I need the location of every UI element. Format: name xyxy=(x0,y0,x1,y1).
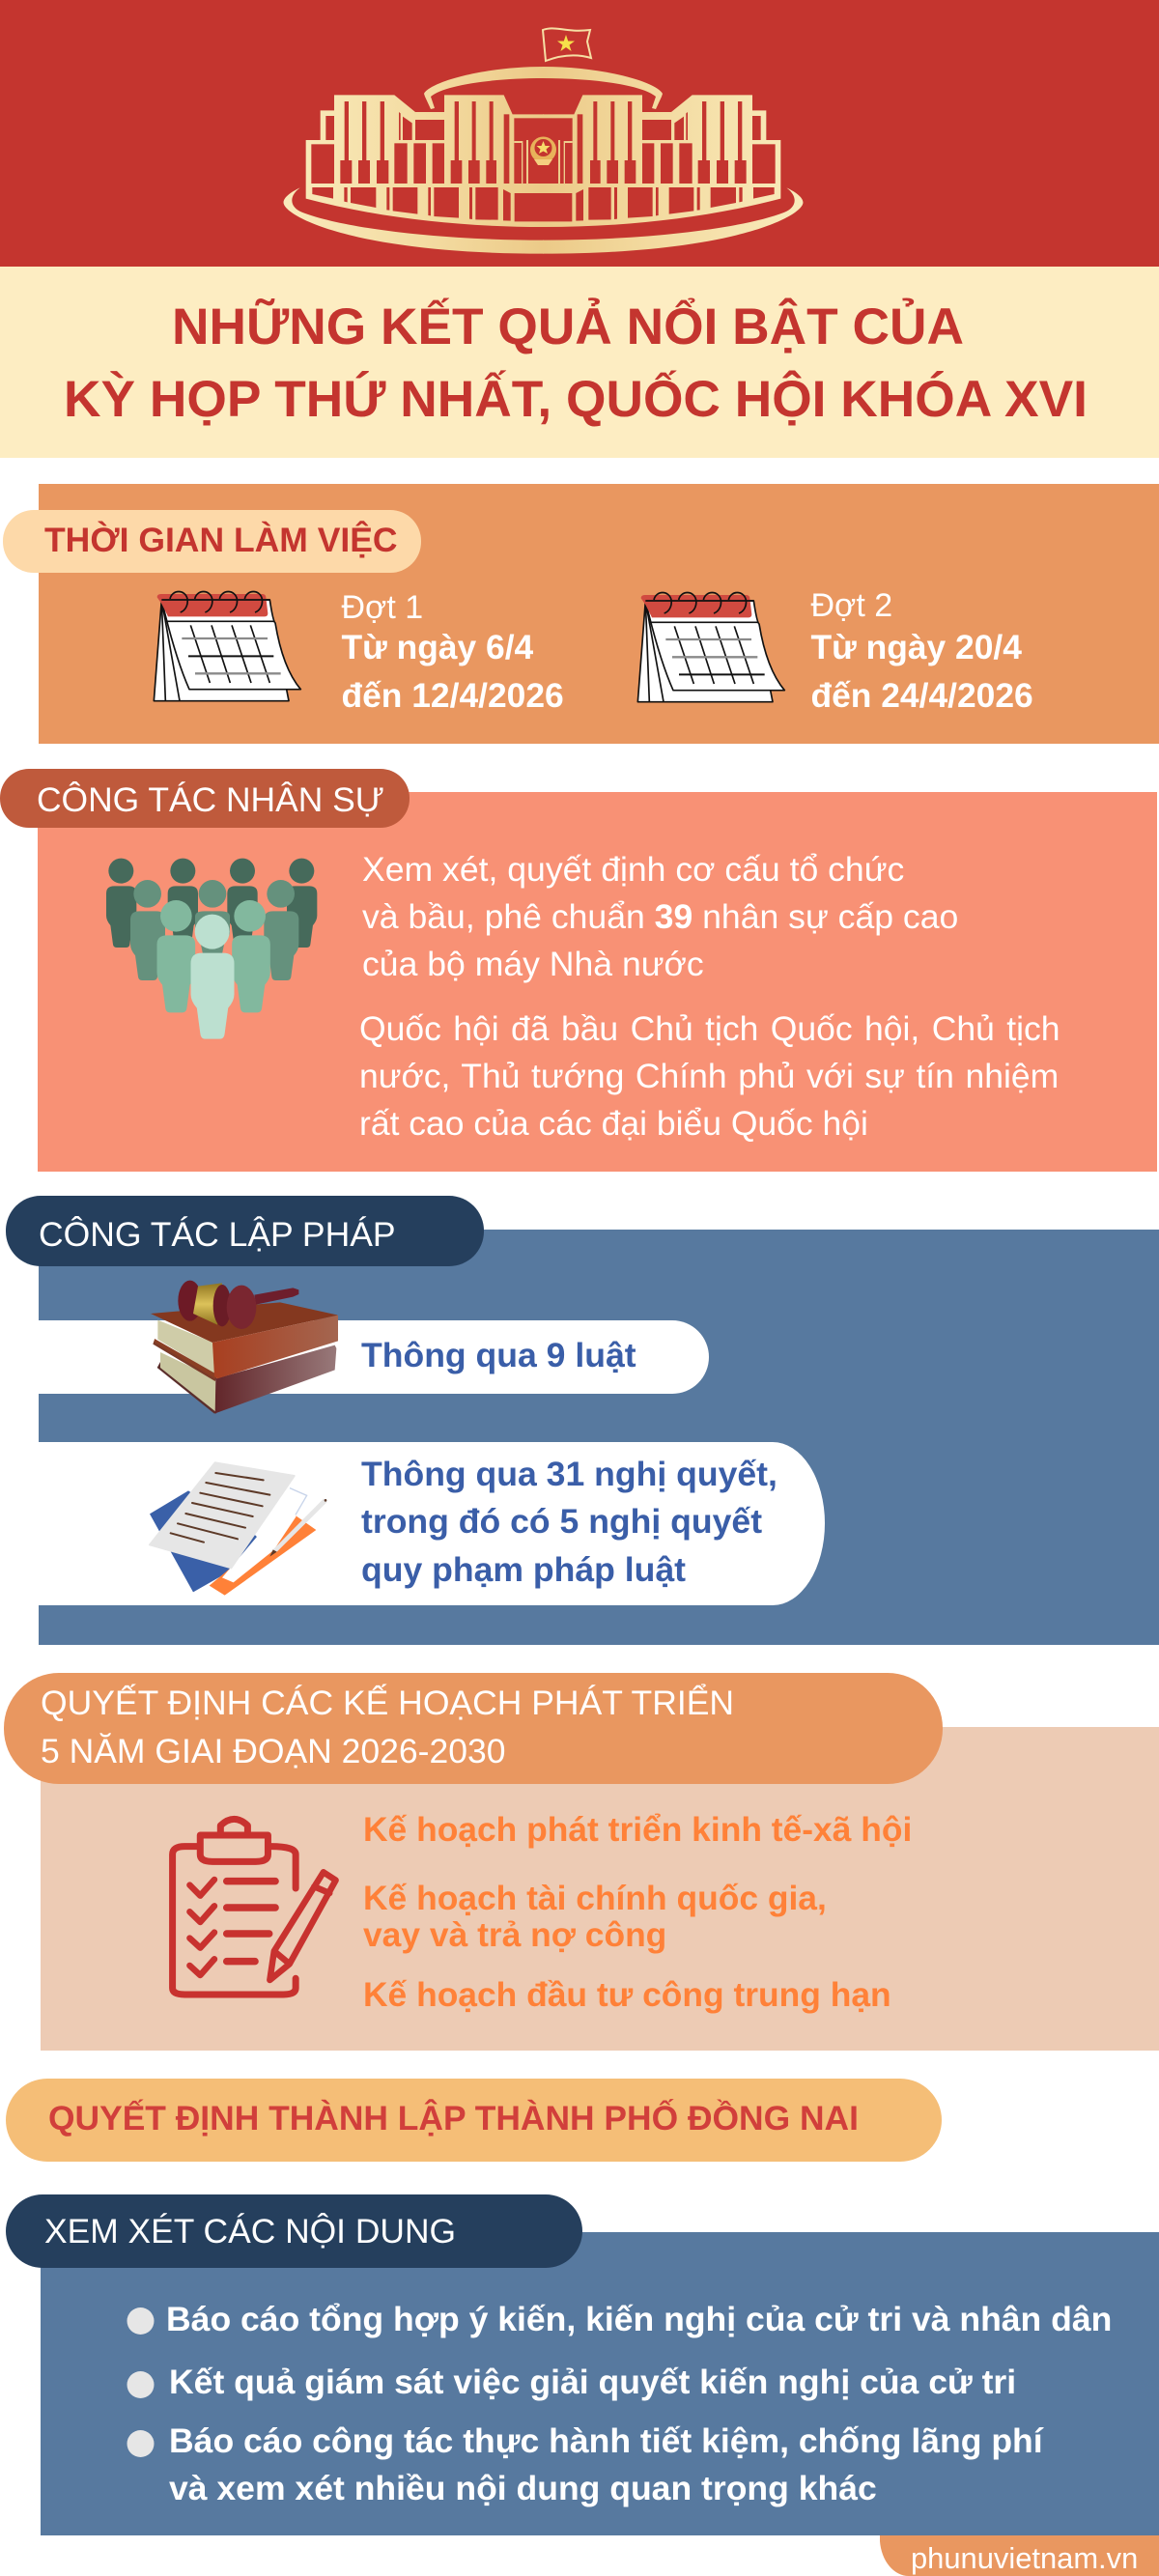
panel: personnel xyxy=(0,769,1157,1172)
icon: national flag xyxy=(543,28,591,61)
text: 31 resolutions: trong đó có 5 nghị quyết xyxy=(361,1502,762,1541)
banner: Dong Nai city xyxy=(6,2079,942,2162)
text: personnel summary: và bầu, phê chuẩn 39 nhân sự cấp cao xyxy=(362,897,958,936)
source badge xyxy=(880,2535,1159,2576)
panel: legislation xyxy=(6,1196,1159,1645)
bullet list: và xem xét nhiều nội dung quan trọng khác xyxy=(169,2469,877,2507)
text: 31 resolutions xyxy=(361,1455,777,1589)
text: leaders elected: rất cao của các đại biểu Quốc hội xyxy=(359,1104,868,1143)
source badge: phunuvietnam.vn xyxy=(911,2541,1138,2575)
bullet list: Báo cáo tổng hợp ý kiến, kiến nghị của cử tri và nhân dân xyxy=(166,2300,1112,2338)
bullet list: Báo cáo công tác thực hành tiết kiệm, chống lãng phí xyxy=(169,2421,1044,2460)
panel: other items xyxy=(6,2194,1159,2535)
text: plans list: vay và trả nợ công xyxy=(363,1915,666,1954)
heading: personnel xyxy=(0,769,410,828)
panel: working time xyxy=(3,484,1159,744)
heading: other items xyxy=(6,2194,582,2268)
icon: national emblem xyxy=(530,137,556,165)
text: 9 laws: Thông qua 9 luật xyxy=(361,1336,636,1374)
heading: working time xyxy=(3,510,421,573)
text: session 2: Từ ngày 20/4 xyxy=(811,628,1022,666)
text: session 1 xyxy=(342,589,564,715)
text: personnel summary: Xem xét, quyết định cơ cấu tổ chức xyxy=(362,850,904,889)
text: leaders elected xyxy=(359,1009,1060,1143)
text: leaders elected: nước, Thủ tướng Chính phủ với sự tín nhiệm xyxy=(359,1057,1059,1095)
bullet list: Kết quả giám sát việc giải quyết kiến nghị của cử tri xyxy=(169,2363,1016,2401)
text: plans list: Kế hoạch đầu tư công trung hạn xyxy=(363,1975,891,2014)
icon: group of people xyxy=(106,859,317,1039)
header banner: parliament building xyxy=(0,0,1159,267)
text: session 2 xyxy=(811,587,1033,715)
bullet list xyxy=(127,2300,1112,2507)
title: KỲ HỌP THỨ NHẤT, QUỐC HỘI KHÓA XVI xyxy=(64,369,1088,428)
text: session 1: Đợt 1 xyxy=(342,589,423,626)
text: plans list xyxy=(363,1810,912,2014)
text: 31 resolutions: quy phạm pháp luật xyxy=(361,1550,686,1589)
icon: calendar 2 xyxy=(637,592,784,702)
heading: five-year plans: 5 NĂM GIAI ĐOẠN 2026-2030 xyxy=(41,1732,505,1770)
text: session 2: Đợt 2 xyxy=(811,587,892,624)
text: plans list: Kế hoạch tài chính quốc gia, xyxy=(363,1879,827,1917)
heading: working time: THỜI GIAN LÀM VIỆC xyxy=(44,521,398,559)
text: personnel summary xyxy=(362,850,958,983)
text: 31 resolutions: Thông qua 31 nghị quyết, xyxy=(361,1455,777,1493)
heading: other items: XEM XÉT CÁC NỘI DUNG xyxy=(44,2212,456,2250)
icon: calendar 1 xyxy=(154,591,300,701)
text: leaders elected: Quốc hội đã bầu Chủ tịch Quốc hội, Chủ tịch xyxy=(359,1009,1060,1048)
banner: Dong Nai city: QUYẾT ĐỊNH THÀNH LẬP THÀNH PHỐ ĐỒNG NAI xyxy=(48,2099,859,2137)
title band xyxy=(0,267,1159,458)
callout: 31 resolutions xyxy=(39,1442,825,1605)
icon: parliament house xyxy=(284,67,803,254)
text: plans list: Kế hoạch phát triển kinh tế-xã hội xyxy=(363,1810,912,1849)
heading: legislation xyxy=(6,1196,484,1266)
callout: 9 laws xyxy=(39,1281,709,1413)
icon: clipboard checklist xyxy=(173,1819,336,1995)
text: personnel summary: của bộ máy Nhà nước xyxy=(362,945,704,983)
title xyxy=(64,297,1088,428)
text: session 1: đến 12/4/2026 xyxy=(342,676,564,715)
icon: documents xyxy=(150,1462,327,1596)
text: session 1: Từ ngày 6/4 xyxy=(342,628,534,666)
heading: five-year plans xyxy=(4,1673,943,1784)
heading: five-year plans: QUYẾT ĐỊNH CÁC KẾ HOẠCH PHÁT TRIỂN xyxy=(41,1684,734,1722)
heading: personnel: CÔNG TÁC NHÂN SỰ xyxy=(37,780,384,819)
icon: books and gavel xyxy=(151,1281,338,1413)
panel: five-year plans xyxy=(4,1673,1159,2051)
heading: legislation: CÔNG TÁC LẬP PHÁP xyxy=(39,1215,396,1254)
title: NHỮNG KẾT QUẢ NỔI BẬT CỦA xyxy=(172,297,964,355)
text: session 2: đến 24/4/2026 xyxy=(811,676,1033,715)
